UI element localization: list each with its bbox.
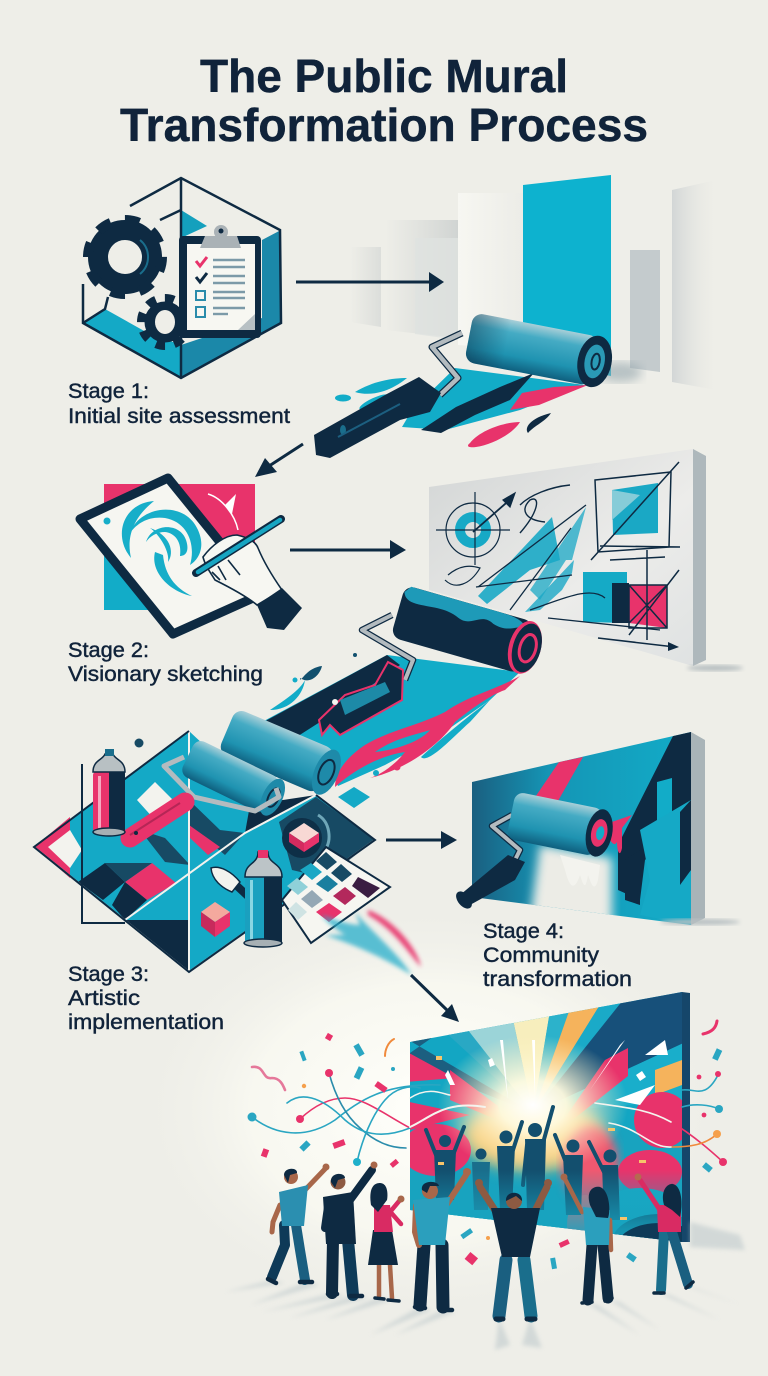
stage 1 wall with teal paint — [350, 175, 716, 390]
sunburst rays — [410, 992, 682, 1130]
arrow: stage 1 to wall — [296, 272, 444, 292]
streamer end dots — [248, 1067, 727, 1240]
title: Transformation Process — [120, 99, 648, 151]
stage 1 label: Stage 1: — [68, 379, 149, 403]
stage 4 label: Stage 4: — [483, 919, 564, 943]
title: The Public Mural — [200, 50, 568, 102]
pink paint splat — [606, 815, 632, 853]
arrow: roller to stage 2 — [255, 444, 303, 477]
target sketch — [436, 485, 570, 585]
stage 4 painted wall — [453, 732, 740, 925]
person 4 — [413, 1168, 471, 1310]
teal strokes — [476, 505, 586, 612]
paint trail — [335, 368, 588, 447]
ground shadows — [225, 1222, 745, 1350]
roller frame — [164, 757, 279, 811]
streamers left — [252, 1073, 485, 1162]
stage 3 label — [68, 962, 224, 1034]
stage 2 label: Stage 2: — [68, 638, 149, 662]
confetti pieces — [261, 1033, 722, 1269]
roller drum — [464, 311, 616, 390]
ribbons and confetti — [248, 1021, 727, 1269]
white light streaks and shards — [445, 1040, 668, 1105]
stage 1 roller with paint trail — [314, 311, 616, 458]
big roller — [218, 708, 347, 799]
paint swoosh — [322, 910, 421, 975]
stage 2 sketch wall — [429, 449, 743, 671]
roller frame — [492, 815, 520, 860]
roller frame — [362, 615, 413, 680]
geometric square sketch — [591, 462, 680, 560]
roller frame — [432, 333, 462, 395]
roller drum — [506, 791, 617, 859]
stage 1 label: Initial site assessment — [68, 404, 290, 428]
stage 3 label: Stage 3: — [68, 962, 149, 986]
icon: site assessment hexagon with gears and clipboard — [83, 178, 281, 378]
geometric diamond base — [34, 731, 375, 972]
stage 3 label: implementation — [68, 1010, 224, 1034]
teal diamond accent — [338, 787, 370, 808]
roller handle — [319, 662, 403, 735]
person 5 — [475, 1179, 552, 1319]
icon: clipboard checklist — [179, 225, 261, 338]
lower colour blobs — [410, 1092, 682, 1242]
final mural — [410, 992, 690, 1242]
icon: small gear — [141, 298, 189, 346]
central light burst — [438, 1035, 628, 1175]
spray can: teal — [244, 850, 282, 947]
streamers right — [252, 1021, 723, 1162]
person 6 — [560, 1174, 612, 1303]
stage 1 label — [68, 379, 290, 428]
arrow: tablet to sketch wall — [290, 540, 406, 559]
icon: large gear — [88, 220, 162, 294]
paint brush — [211, 867, 252, 900]
stage 3 label: Artistic — [68, 986, 140, 1010]
spray can: red — [93, 749, 125, 836]
stage 2 label — [68, 638, 263, 686]
people celebrating — [268, 1162, 693, 1319]
paint drips — [560, 855, 600, 886]
hand holding pen — [196, 519, 302, 630]
person 2 — [323, 1162, 378, 1296]
arrow: stage 3 to community wall — [386, 831, 457, 849]
stage 2 roller with paint band — [258, 585, 548, 787]
person 1 — [268, 1164, 330, 1283]
yellow confetti on mural — [436, 1056, 646, 1220]
tablet — [80, 478, 262, 634]
pink roller handle — [130, 802, 185, 838]
roller handle — [314, 377, 441, 458]
cube: lower — [201, 902, 230, 937]
stage 4 label: Community — [483, 943, 599, 967]
stage 3 artist toolkit composition — [34, 708, 421, 975]
cube: pink top right — [282, 815, 329, 858]
title — [120, 50, 648, 151]
colour blocks sketch — [530, 550, 679, 651]
roller handle — [453, 855, 525, 912]
roller drum — [391, 585, 548, 678]
colour palette — [282, 847, 390, 943]
icon: tablet sketching with hand — [80, 478, 302, 634]
person 3 — [368, 1183, 404, 1301]
confetti dots — [373, 764, 400, 776]
stage 4 label — [483, 919, 632, 991]
stage 2 label: Visionary sketching — [68, 662, 263, 686]
arrow: to final mural — [411, 975, 459, 1022]
small roller — [179, 738, 290, 820]
paint band — [258, 653, 520, 787]
mural crowd silhouettes — [426, 1107, 620, 1220]
stage 4 label: transformation — [483, 967, 632, 991]
person 7 — [634, 1174, 693, 1293]
swirl on screen — [104, 501, 201, 596]
